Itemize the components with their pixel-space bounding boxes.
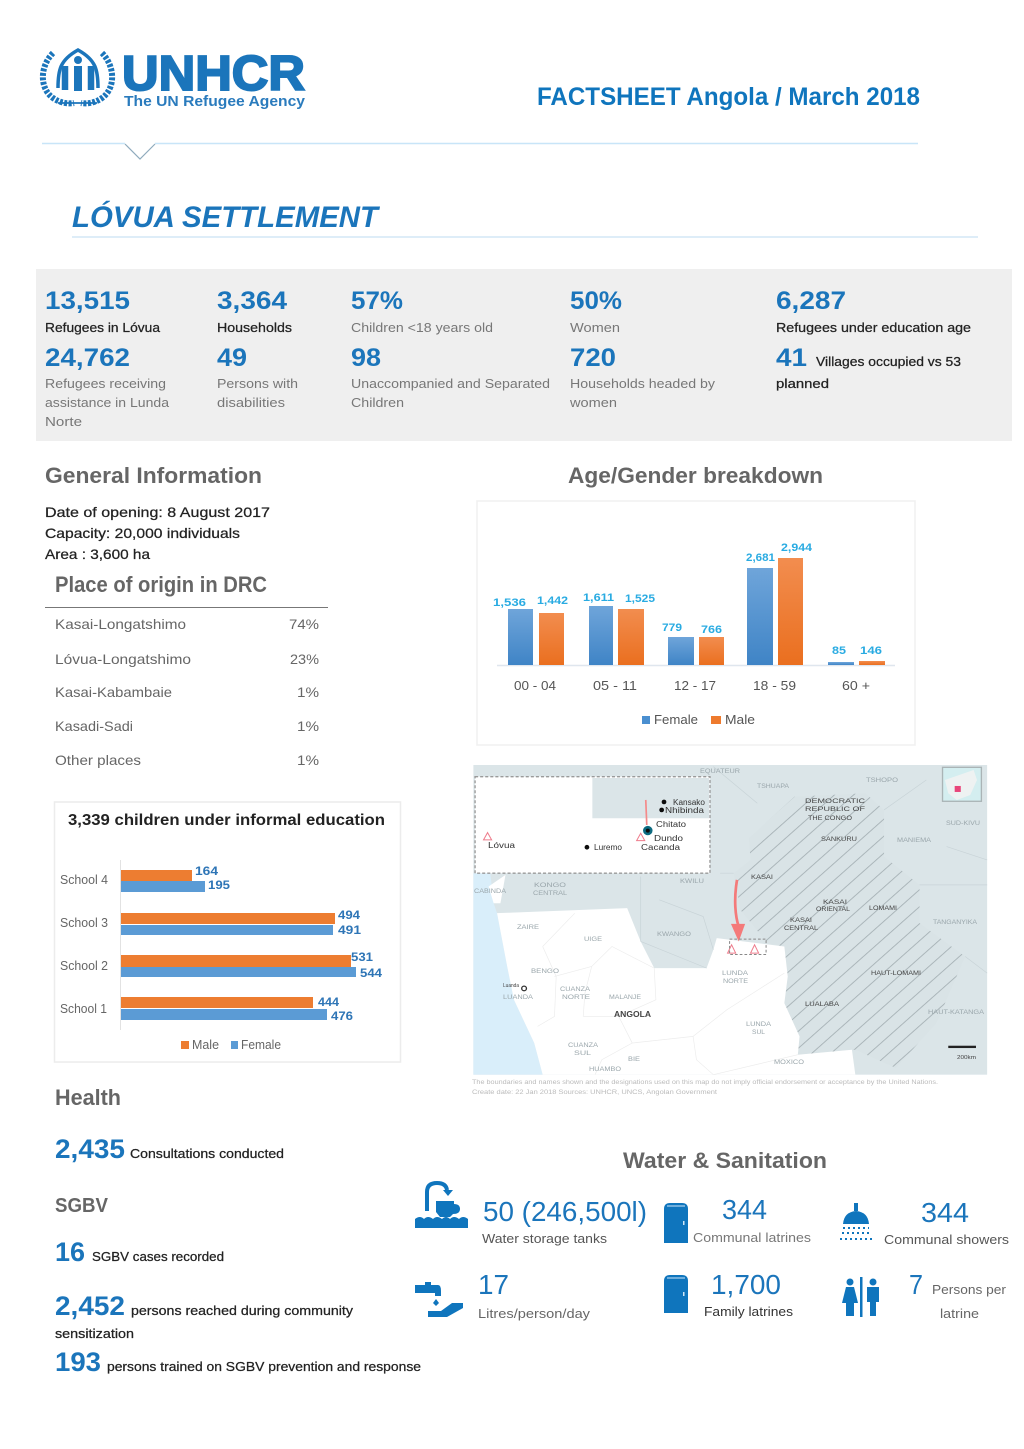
stat: family latrines: Family latrines: [704, 1304, 794, 1319]
stat: villages occupied: 41: [776, 344, 807, 372]
data labels: [195, 866, 383, 1023]
data labels: 779: [662, 622, 682, 634]
data labels: 2,944: [781, 542, 813, 554]
stat: persons per latrine: Persons per: [932, 1282, 1007, 1297]
data labels: 444: [318, 997, 340, 1009]
inset labels: Luremo: [594, 843, 623, 852]
inset labels: Cacanda: [641, 843, 681, 852]
stat: refugees in Lóvua: 13,515: [45, 287, 130, 315]
stat: households: [217, 287, 293, 335]
bar chart: informal education: [54, 802, 400, 1062]
map labels: SUL: [574, 1050, 592, 1057]
stat: water storage tanks: [482, 1196, 647, 1246]
stat: villages occupied: [776, 344, 961, 391]
heading: SGBV: SGBV: [55, 1195, 109, 1217]
row: other places: Other places: [55, 752, 141, 768]
stat: women: 50%: [570, 287, 622, 315]
logo tagline: The UN Refugee Agency: [124, 93, 306, 110]
data labels: 85: [832, 645, 846, 657]
stat: assistance in Lunda Norte: 24,762: [45, 344, 130, 372]
map: settlement location: SANKURU: [821, 836, 857, 843]
map: settlement location: KASAI: [751, 874, 773, 881]
stat: households headed by women: Households headed by: [570, 376, 716, 391]
data labels: 195: [208, 880, 231, 892]
inset labels: Kansako: [673, 798, 706, 807]
stat: villages occupied: Villages occupied vs 53: [816, 354, 961, 369]
stat: communal showers: 344: [921, 1197, 969, 1228]
stat: households: Households: [217, 320, 293, 335]
row: Kasadi-Sadi: 1%: [297, 718, 319, 734]
stat: assistance in Lunda Norte: assistance in Lunda: [45, 395, 170, 410]
text block: settlement facts: Date of opening: 8 August 2017: [45, 504, 270, 520]
panel: SGBV: [55, 1195, 421, 1377]
map labels: TSHUAPA: [757, 783, 790, 790]
map labels: UIGE: [584, 936, 603, 943]
row: Lóvua-Longatshimo: [55, 651, 319, 667]
stat: community sensitization: sensitization: [55, 1326, 134, 1341]
icon: female and male figures: [842, 1277, 879, 1317]
map labels: SUL: [752, 1029, 765, 1036]
bars: female: [121, 881, 356, 1020]
icon: family latrine door: [664, 1275, 688, 1313]
map labels: LUNDA: [746, 1021, 772, 1028]
age axis labels: [514, 679, 870, 693]
map labels: KWILU: [680, 878, 704, 885]
map: settlement location: LUALABA: [805, 1001, 840, 1008]
Angola: [497, 908, 855, 1075]
stat: litres per person per day: [478, 1269, 591, 1321]
stat: households headed by women: women: [569, 395, 617, 410]
chart legend: Female: [241, 1038, 281, 1052]
Cabinda: [489, 875, 505, 903]
school labels: [60, 873, 108, 1016]
stat: consultations: Consultations conducted: [130, 1146, 284, 1161]
stat: households headed by women: [569, 344, 716, 410]
row: Kasai-Longatshimo: Kasai-Longatshimo: [55, 616, 186, 632]
inset labels: Lóvua: [488, 841, 516, 850]
stat: persons trained: persons trained on SGBV prevention and response: [107, 1359, 421, 1374]
icon: tap and cup over water: [415, 1183, 468, 1228]
map: settlement location: 200km: [957, 1055, 976, 1061]
inset labels: [488, 798, 706, 852]
stat: education age: Refugees under education age: [776, 320, 971, 335]
stat: refugees in Lóvua: Refugees in Lóvua: [45, 320, 161, 335]
map labels: CABINDA: [474, 888, 507, 895]
panel: general information: [45, 463, 270, 562]
map: settlement location: [472, 765, 987, 1096]
stat: disabilities: [217, 344, 298, 410]
map: settlement location: THE CONGO: [808, 815, 852, 822]
row: Kasadi-Sadi: Kasadi-Sadi: [55, 718, 133, 734]
stat: unaccompanied children: [351, 344, 550, 410]
chart legend: Male: [725, 712, 755, 727]
stat: disabilities: Persons with: [217, 376, 298, 391]
chart title: 3,339 children under informal education: [68, 812, 385, 829]
age axis labels: 05 - 11: [593, 679, 637, 693]
map: settlement location: DEMOCRATIC: [805, 798, 865, 805]
inset labels: Chitato: [656, 820, 687, 829]
data labels: 1,442: [537, 595, 568, 607]
map labels: HUAMBO: [589, 1066, 621, 1073]
logo wordmark: UNHCR: [122, 47, 305, 101]
stat: assistance in Lunda Norte: Refugees receiving: [45, 376, 166, 391]
stat: villages occupied: planned: [776, 376, 829, 391]
stat: consultations: 2,435: [55, 1134, 125, 1164]
heading: place of origin: Place of origin in DRC: [55, 572, 267, 597]
map disclaimer: [472, 1079, 938, 1096]
markers: [643, 826, 653, 835]
stat: disabilities: disabilities: [217, 395, 286, 410]
stat: litres per person per day: Litres/person/day: [478, 1306, 591, 1321]
panel: place of origin table: [45, 572, 328, 768]
map labels: LUNDA: [722, 970, 749, 977]
stat: disabilities: 49: [217, 344, 247, 372]
bars: female: [508, 568, 854, 665]
heading: general information: General Information: [45, 463, 262, 488]
heading: age and gender breakdown: Age/Gender breakdown: [568, 463, 823, 488]
header rule with notch: [42, 144, 918, 159]
row: Lóvua-Longatshimo: 23%: [290, 651, 319, 667]
stat: education age: 6,287: [776, 287, 846, 315]
map: settlement location: Luanda: [503, 983, 519, 989]
age axis labels: 00 - 04: [514, 679, 556, 693]
stat: households: 3,364: [217, 287, 287, 315]
map labels: BENGO: [531, 968, 559, 975]
bars: male: [121, 870, 351, 1008]
icon: communal latrine door: [664, 1203, 688, 1243]
map: settlement location: KASAI: [790, 917, 812, 924]
data labels: 491: [338, 925, 362, 937]
arrows: [646, 800, 647, 825]
chart legend: [181, 1038, 281, 1052]
chart legend: Female: [654, 712, 698, 727]
bars: male: [539, 558, 885, 665]
map: settlement location: LOMAMI: [869, 905, 897, 912]
locator: [943, 767, 981, 801]
stat: communal latrines: 344: [722, 1194, 767, 1225]
inset labels: Dundo: [654, 834, 684, 843]
stat: water storage tanks: Water storage tanks: [482, 1231, 608, 1246]
stat: communal latrines: [693, 1194, 812, 1245]
text block: settlement facts: Capacity: 20,000 individuals: [45, 525, 240, 541]
heading: water and sanitation: Water & Sanitation: [623, 1148, 827, 1173]
data labels: 494: [338, 910, 361, 922]
bar chart: age and gender: [477, 501, 915, 745]
stat: persons per latrine: 7: [909, 1269, 923, 1300]
stat: unaccompanied children: Children: [351, 395, 404, 410]
stat: households headed by women: 720: [570, 344, 616, 372]
map labels: KWANGO: [657, 931, 691, 938]
map labels: HAUT-KATANGA: [928, 1009, 985, 1016]
chart legend: [642, 712, 755, 727]
map labels: [474, 768, 985, 1073]
settlement title: LÓVUA SETTLEMENT: [72, 200, 381, 234]
data labels: 544: [360, 968, 383, 980]
row: Kasai-Longatshimo: 74%: [289, 616, 319, 632]
map disclaimer: Create date: 22 Jan 2018 Sources: UNHCR, UNCS, Angolan Government: [472, 1089, 717, 1096]
icon: tap and hand: [415, 1282, 463, 1317]
map labels: NORTE: [723, 978, 749, 985]
stat: communal showers: [884, 1197, 1010, 1247]
data labels: 766: [701, 624, 722, 636]
map labels: NORTE: [562, 994, 591, 1001]
age axis labels: 18 - 59: [753, 679, 796, 693]
row: Kasai-Kabambaie: 1%: [297, 684, 319, 700]
stat: community sensitization: persons reached during community: [131, 1303, 354, 1318]
stat: family latrines: 1,700: [711, 1269, 781, 1300]
map: settlement location: ANGOLA: [614, 1010, 651, 1019]
heading: health: Health: [55, 1085, 121, 1110]
inset labels: Nhibinda: [665, 806, 705, 815]
row: other places: [55, 752, 319, 768]
map labels: CENTRAL: [533, 890, 567, 897]
inset: [475, 777, 710, 873]
stat: children under 18: 57%: [351, 287, 403, 315]
panel: water and sanitation: [415, 1148, 1010, 1321]
stat: assistance in Lunda Norte: [45, 344, 170, 429]
school labels: School 4: [60, 873, 108, 887]
icon: shower: [840, 1203, 872, 1239]
map disclaimer: The boundaries and names shown and the designations used on this map do not imply official endorsement or acceptance by the United Nations.: [472, 1079, 938, 1086]
data labels: 1,525: [625, 593, 655, 605]
panel: health: [55, 1085, 284, 1164]
map labels: SUD-KIVU: [946, 820, 980, 827]
stat: SGBV cases: [55, 1237, 224, 1267]
stat: women: [570, 287, 622, 335]
icon: UNHCR emblem: [43, 50, 112, 103]
map labels: BIE: [628, 1056, 641, 1063]
map labels: MANIEMA: [897, 837, 932, 844]
school labels: School 3: [60, 916, 108, 930]
stat: community sensitization: 2,452: [55, 1291, 125, 1321]
stat: consultations: [55, 1134, 284, 1164]
data labels: 1,536: [493, 597, 526, 609]
map labels: TANGANYIKA: [933, 919, 978, 926]
map: settlement location: HAUT-LOMAMI: [871, 970, 921, 977]
map: settlement location: REPUBLIC OF: [805, 806, 865, 813]
school labels: School 2: [60, 959, 108, 973]
text block: settlement facts: [45, 504, 270, 562]
stat: community sensitization: [55, 1291, 354, 1341]
map labels: CUANZA: [560, 986, 591, 993]
stat: communal showers: Communal showers: [884, 1232, 1010, 1247]
age axis labels: 60 +: [842, 679, 870, 693]
stat: persons trained: 193: [55, 1347, 101, 1377]
data labels: 1,611: [583, 592, 614, 604]
stat: unaccompanied children: 98: [351, 344, 381, 372]
stat: SGBV cases: 16: [55, 1237, 85, 1267]
data labels: 164: [195, 866, 219, 878]
row: other places: 1%: [297, 752, 319, 768]
map labels: ZAIRE: [517, 924, 540, 931]
data labels: 476: [331, 1011, 353, 1023]
row: Kasai-Kabambaie: [55, 684, 319, 700]
stat: education age: [776, 287, 971, 335]
stat: litres per person per day: 17: [478, 1269, 509, 1300]
map labels: LUANDA: [503, 994, 534, 1001]
stat: unaccompanied children: Unaccompanied and Separated: [351, 376, 550, 391]
row: Kasai-Kabambaie: Kasai-Kabambaie: [55, 684, 172, 700]
data labels: [493, 542, 882, 657]
hatched conflict region: [734, 793, 965, 1068]
stat: SGBV cases: SGBV cases recorded: [92, 1249, 224, 1264]
text block: settlement facts: Area : 3,600 ha: [45, 546, 150, 562]
map: settlement location: ORIENTAL: [816, 906, 850, 913]
map labels: MALANJE: [609, 994, 642, 1001]
data labels: 146: [860, 645, 882, 657]
sea: [473, 873, 543, 1075]
map labels: CUANZA: [568, 1042, 599, 1049]
map labels: TSHOPO: [866, 777, 898, 784]
map labels: EQUATEUR: [700, 768, 740, 775]
row: Kasai-Longatshimo: [55, 616, 319, 632]
map labels: MOXICO: [774, 1059, 804, 1066]
panel: key figures: [36, 269, 1012, 441]
map labels: KONGO: [534, 882, 566, 889]
stat: persons trained: [55, 1347, 421, 1377]
stat: refugees in Lóvua: [45, 287, 161, 335]
row: Lóvua-Longatshimo: Lóvua-Longatshimo: [55, 651, 191, 667]
stat: communal latrines: Communal latrines: [693, 1230, 812, 1245]
age axis labels: 12 - 17: [674, 679, 716, 693]
map: settlement location: KASAI: [823, 899, 847, 906]
stat: water storage tanks: 50 (246,500l): [483, 1196, 647, 1227]
header: UNHCR logo: [43, 47, 306, 110]
row: Kasadi-Sadi: [55, 718, 319, 734]
factsheet heading: FACTSHEET Angola / March 2018: [537, 83, 920, 111]
stat: women: Women: [570, 320, 620, 335]
stat: persons per latrine: [909, 1269, 1007, 1321]
stat: children under 18: Children <18 years old: [351, 320, 493, 335]
map: settlement location: CENTRAL: [784, 925, 818, 932]
chart legend: Male: [192, 1038, 219, 1052]
data labels: 2,681: [746, 552, 775, 564]
stat: children under 18: [351, 287, 493, 335]
stat: assistance in Lunda Norte: Norte: [45, 414, 82, 429]
title underline: [72, 236, 978, 238]
stat: persons per latrine: latrine: [940, 1306, 979, 1321]
school labels: School 1: [60, 1002, 107, 1016]
stat: family latrines: [704, 1269, 794, 1319]
data labels: 531: [351, 952, 374, 964]
